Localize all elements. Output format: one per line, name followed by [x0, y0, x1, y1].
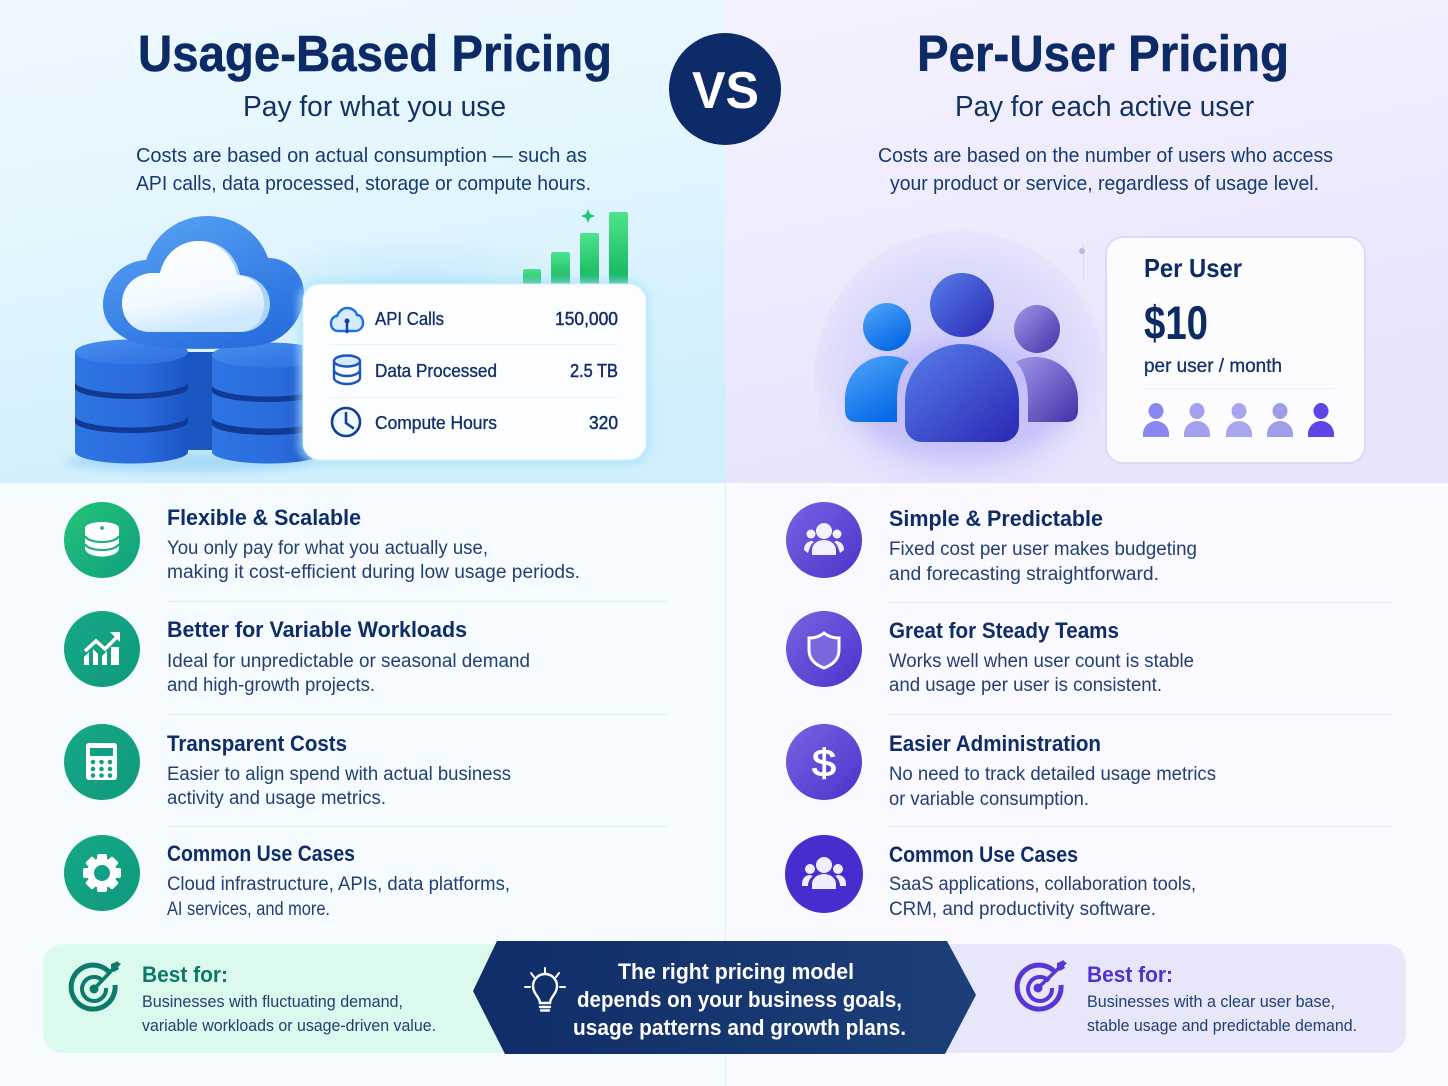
description: usage-based [136, 144, 591, 195]
description: per-user [878, 144, 1333, 195]
subtitle: pay for each active user: Pay for each active user [955, 91, 1254, 123]
best for: usage-based [43, 944, 543, 1053]
metric: api calls: API Calls [375, 308, 444, 329]
title: usage-based pricing: Usage-Based Pricing [138, 25, 612, 82]
metric: data processed [334, 356, 618, 384]
benefit: flexible and scalable: making it cost-efficient during low usage periods. [167, 562, 580, 583]
benefit: common use cases, usage-based [64, 835, 510, 920]
benefit: common use cases, per-user [785, 835, 1196, 920]
benefit: great for steady teams [786, 611, 1194, 696]
metrics card [298, 280, 650, 465]
benefit: common use cases, usage-based: Cloud infrastructure, APIs, data platforms, [167, 874, 510, 895]
icon: target purple [1017, 960, 1067, 1009]
best for: per-user: Best for: [1087, 962, 1173, 987]
price: $10 [1144, 296, 1208, 349]
benefit: transparent costs: Easier to align spend with actual business [167, 764, 511, 785]
best for: usage-based: Best for: [142, 962, 228, 987]
benefit: simple and predictable [786, 502, 1197, 585]
benefit: easier administration: $ [812, 743, 836, 785]
description: usage-based: Costs are based on actual consumption — such as [136, 144, 587, 167]
callout: right pricing model [473, 941, 976, 1054]
benefit: better for variable workloads [64, 611, 530, 696]
best for: per-user: Businesses with a clear user base, [1087, 992, 1335, 1011]
benefit: common use cases, usage-based: AI services, and more. [167, 899, 330, 920]
vs badge: VS [692, 62, 759, 120]
panel: per-user benefits [785, 502, 1392, 920]
benefit: better for variable workloads: and high-growth projects. [167, 675, 375, 696]
benefit: easier administration: No need to track detailed usage metrics [889, 764, 1216, 785]
best for: usage-based: variable workloads or usage-driven value. [142, 1016, 436, 1035]
pin marker [1079, 243, 1085, 280]
benefit: easier administration: Easier Administration [889, 731, 1101, 756]
benefit: flexible and scalable: Flexible & Scalable [167, 505, 361, 530]
benefit: common use cases, per-user: SaaS applications, collaboration tools, [889, 874, 1196, 895]
benefit: simple and predictable: Fixed cost per user makes budgeting [889, 539, 1197, 560]
callout: right pricing model: depends on your business goals, [577, 987, 902, 1012]
metric: data processed: Data Processed [375, 360, 497, 381]
illustration: backdrop circle [814, 231, 1106, 483]
subtitle: pay for what you use: Pay for what you use [243, 91, 506, 123]
benefit: flexible and scalable [64, 502, 580, 583]
best for: per-user [920, 944, 1406, 1053]
metric: compute hours [332, 408, 618, 436]
best for: per-user: stable usage and predictable demand. [1087, 1016, 1357, 1035]
benefit: common use cases, usage-based: Common Use Cases [167, 841, 355, 866]
benefit: transparent costs [64, 724, 511, 809]
benefit: transparent costs: Transparent Costs [167, 731, 347, 756]
illustration: database stacks [65, 340, 325, 472]
metric: compute hours: 320 [589, 412, 618, 433]
metric: api calls: 150,000 [555, 308, 618, 329]
benefit: great for steady teams: and usage per user is consistent. [889, 675, 1162, 696]
description: per-user: your product or service, regardless of usage level. [890, 172, 1319, 195]
panel: usage-based benefits [64, 502, 668, 920]
benefit: transparent costs: activity and usage metrics. [167, 788, 386, 809]
card heading: Per User [1144, 253, 1242, 283]
benefit: easier administration [786, 724, 1216, 810]
panel: usage-based header [0, 0, 725, 483]
benefit: simple and predictable: and forecasting straightforward. [889, 564, 1159, 585]
benefit: better for variable workloads: Ideal for unpredictable or seasonal demand [167, 651, 530, 672]
benefit: great for steady teams: Works well when user count is stable [889, 651, 1194, 672]
vs badge [669, 33, 781, 145]
panel: per-user header [725, 0, 1448, 483]
chart: growth bars [523, 209, 628, 284]
metric: data processed: 2.5 TB [570, 360, 618, 381]
benefit: flexible and scalable: You only pay for what you actually use, [167, 538, 488, 559]
benefit: simple and predictable: Simple & Predictable [889, 506, 1103, 531]
description: usage-based: API calls, data processed, storage or compute hours. [136, 172, 591, 195]
benefit: common use cases, per-user: CRM, and productivity software. [889, 899, 1156, 920]
best for: usage-based: Businesses with fluctuating demand, [142, 992, 403, 1011]
illustration: cloud [103, 216, 304, 349]
metric: api calls [331, 308, 618, 333]
benefit: great for steady teams: Great for Steady Teams [889, 618, 1119, 643]
title: per-user pricing: Per-User Pricing [917, 25, 1289, 82]
icon: lightbulb [525, 968, 565, 1010]
benefit: better for variable workloads: Better for Variable Workloads [167, 617, 467, 642]
price unit: per user / month [1144, 355, 1282, 377]
mini user icons [1143, 403, 1334, 437]
callout: right pricing model: usage patterns and growth plans. [573, 1015, 906, 1040]
description: per-user: Costs are based on the number of users who access [878, 144, 1333, 167]
benefit: common use cases, per-user: Common Use Cases [889, 842, 1078, 867]
icon: target green [71, 961, 121, 1009]
callout: right pricing model: The right pricing model [618, 959, 854, 984]
illustration: user group [845, 273, 1078, 460]
metric: compute hours: Compute Hours [375, 412, 497, 433]
benefit: easier administration: or variable consumption. [889, 789, 1089, 810]
pricing card [1106, 237, 1365, 463]
